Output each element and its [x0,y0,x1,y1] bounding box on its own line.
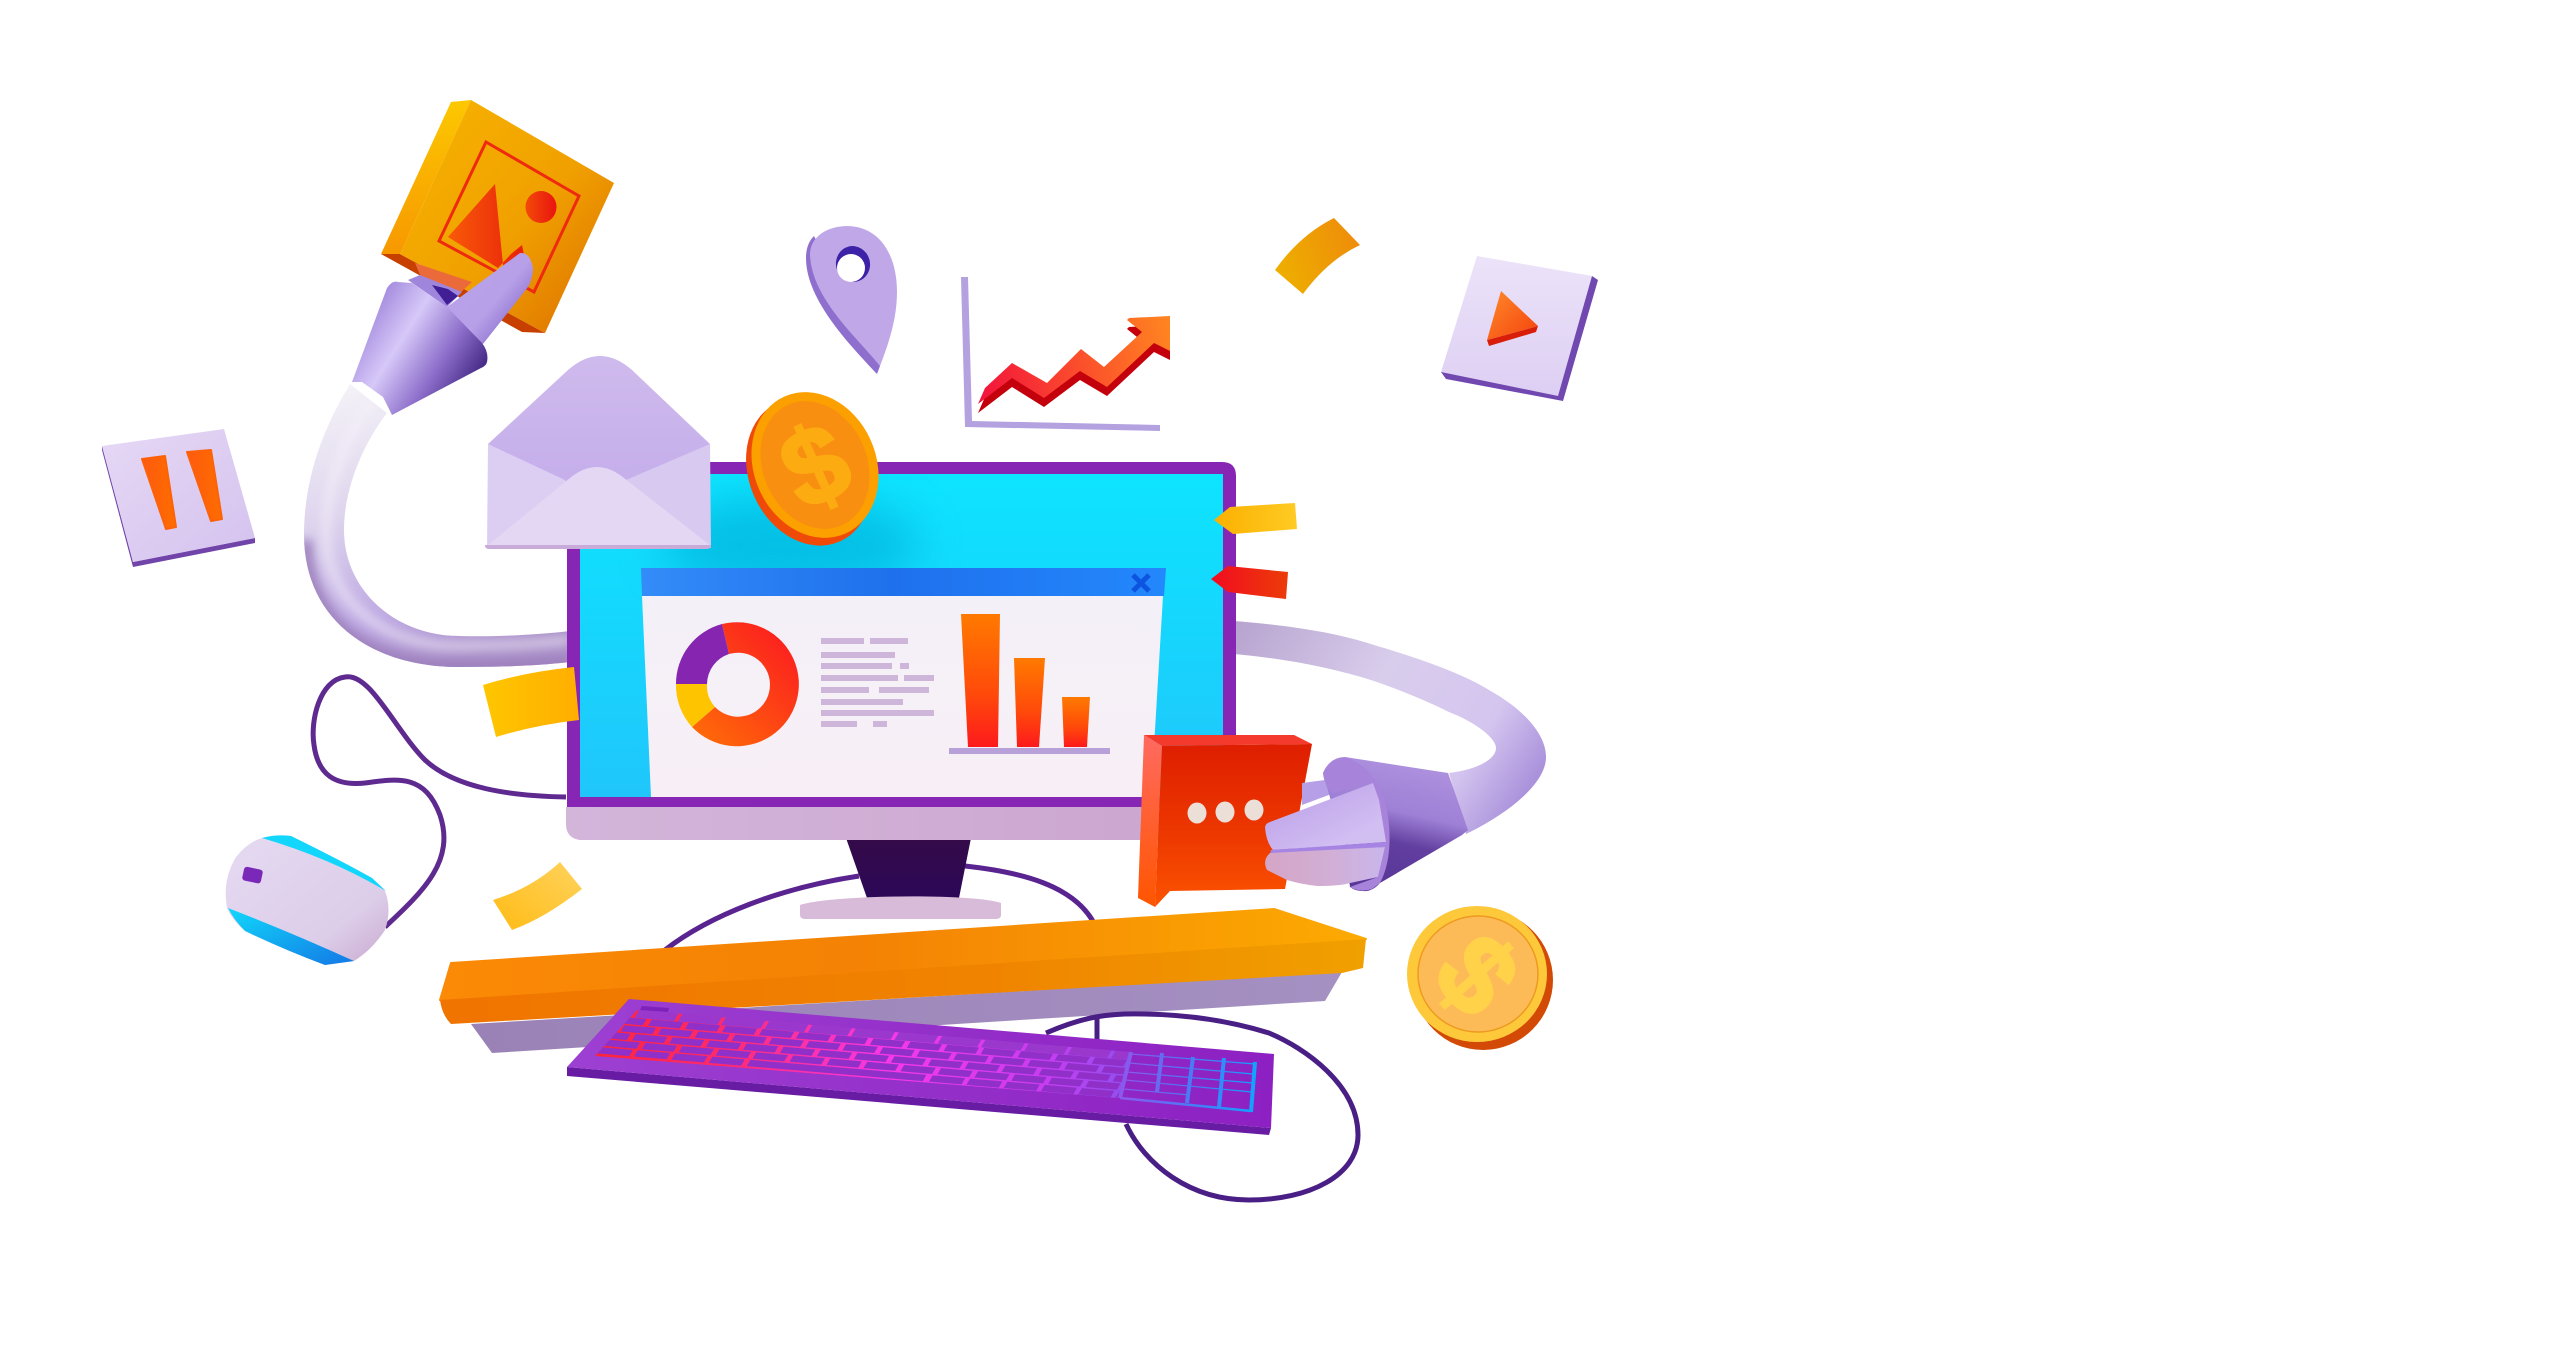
tile underside stub [415,263,472,293]
envelope right side [597,444,711,548]
bubble face [1155,744,1312,907]
icon: orange dollar coin [723,372,901,566]
icon: location pin [806,226,897,374]
donut chart [676,622,799,746]
envelope left side [487,444,597,548]
tile bottom edge [381,254,545,333]
plug finger [447,253,533,344]
pause tile face [102,429,255,562]
play tile edges [1441,276,1598,401]
cone opening [1323,757,1390,891]
shelf underside [471,972,1342,1053]
bubble left edge [1138,735,1162,907]
icon: picture tile [381,100,614,333]
picture sun [526,191,556,223]
cable: right plug cable [1234,621,1546,834]
icon: pause tile [102,429,255,567]
dollar symbol: $ [763,398,867,533]
cable: left plug cable [304,384,570,668]
tile face [400,100,614,333]
keyboard main keys [595,1010,1129,1098]
key rows [598,1010,1129,1098]
plug cone [352,282,487,415]
wire: keyboard cable behind stand [665,866,1095,950]
keyboard esc key [640,1006,669,1012]
shelf top [440,909,1366,1000]
icon: play tile [1441,256,1598,401]
small prong [1302,780,1334,805]
monitor stand [800,838,1001,919]
arrow face [978,316,1170,404]
keyboard [514,999,1274,1135]
wire: lower loop cable [1046,1014,1358,1200]
keyboard thickness [567,1067,1271,1135]
desk bar: orange shelf [440,909,1366,1053]
icon: yellow tag [1214,503,1297,534]
icon: right plug [1265,757,1468,891]
play triangle [1487,326,1538,346]
key glow bed [595,1010,1130,1098]
mouse top band [262,835,386,891]
pin hole [832,242,874,286]
mouse [226,835,388,965]
keyboard numpad [1120,1052,1255,1112]
prong slot [1270,842,1386,854]
picture frame outline [439,142,579,292]
wire: mouse cable [313,677,566,927]
monitor frame [567,462,1236,807]
chart: growth arrow with axes [961,277,1170,431]
stand neck [846,838,971,898]
picture mountain [448,184,528,285]
mouse bottom band [228,908,354,965]
app window [641,568,1166,797]
mouse button [242,866,263,884]
monitor chin [566,807,1240,840]
bubble dots [1188,800,1264,824]
plug cone [1323,757,1468,891]
window title bar [641,568,1166,596]
monitor [566,462,1240,840]
icon: red tag [1211,566,1288,599]
tile left edge [381,100,471,254]
mouse body [226,835,388,965]
plug neck [408,275,462,307]
text lines [821,638,934,727]
upper prong [1265,783,1386,850]
pause bars [142,450,222,529]
monitor screen [580,474,1223,797]
envelope flap [488,356,710,500]
arrow depth [978,325,1170,413]
keyboard top face [567,999,1274,1128]
icon: close x [1133,575,1149,591]
icon: top plug [352,253,533,415]
note: lower yellow ribbon [493,862,582,930]
speech bubble [1138,735,1312,907]
icon: envelope [485,356,711,549]
note: yellow sticky left [483,667,579,737]
chart axes [961,277,1160,431]
envelope bottom edge [485,545,711,549]
bubble top edge [1144,735,1312,746]
ribbon: top orange [1275,218,1360,294]
illustration: computer with floating marketing icons [102,100,1598,1202]
icon: gold dollar coin [1407,906,1553,1050]
stand base [800,896,1001,919]
window body [642,596,1163,797]
pause tile edge [102,446,255,567]
play tile face [1441,256,1592,396]
envelope front [487,467,711,546]
dollar symbol: $ [1411,911,1543,1039]
lower prong [1265,847,1385,886]
bar chart [949,614,1110,754]
shelf front [440,939,1366,1024]
